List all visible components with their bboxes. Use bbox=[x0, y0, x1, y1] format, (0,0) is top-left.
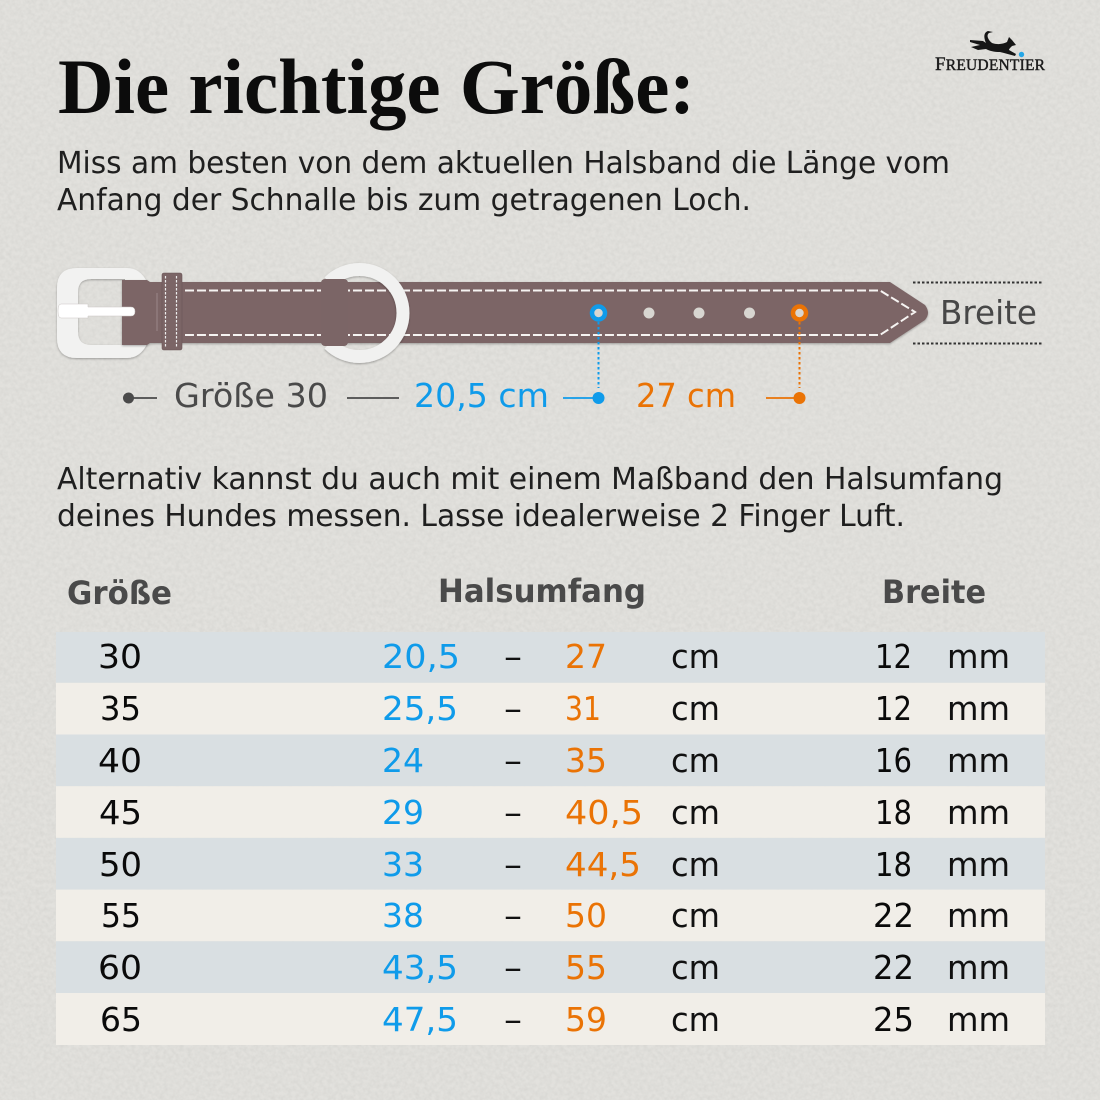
row 30: 30 bbox=[98, 637, 142, 676]
row 50: 50 bbox=[99, 845, 142, 884]
row 65: 59 bbox=[565, 1000, 607, 1039]
belt diagram bbox=[57, 268, 928, 388]
row 55: – bbox=[504, 896, 522, 935]
table header: Größe bbox=[67, 574, 172, 612]
row 35 bbox=[56, 683, 1045, 734]
row 65 bbox=[56, 993, 1045, 1045]
row 40: 16 bbox=[875, 741, 912, 780]
size example legend: 27 cm bbox=[636, 376, 736, 415]
row 45: 45 bbox=[99, 793, 142, 832]
row 60: mm bbox=[947, 948, 1010, 987]
row 50: cm bbox=[671, 845, 720, 884]
row 65: 47,5 bbox=[382, 1000, 458, 1039]
row 60: 43,5 bbox=[382, 948, 458, 987]
stitching bbox=[185, 290, 915, 335]
row 35: mm bbox=[947, 689, 1010, 728]
size example legend bbox=[123, 376, 806, 415]
intro text: Anfang der Schnalle bis zum getragenen Loch. bbox=[57, 183, 751, 218]
size example legend: 20,5 cm bbox=[414, 376, 549, 415]
row 60: 22 bbox=[873, 948, 914, 987]
row 50 bbox=[56, 838, 1045, 890]
row 45: cm bbox=[671, 793, 720, 832]
row 50: 44,5 bbox=[565, 845, 641, 884]
row 65: 25 bbox=[873, 1000, 914, 1039]
row 35: cm bbox=[671, 689, 720, 728]
row 30: 20,5 bbox=[382, 637, 460, 676]
logo: Freudentier bbox=[935, 31, 1046, 75]
row 40: mm bbox=[947, 741, 1010, 780]
row 60: – bbox=[504, 948, 522, 987]
intro text bbox=[57, 146, 950, 218]
row 60 bbox=[56, 941, 1045, 993]
belt strap bbox=[122, 280, 928, 345]
row 65: mm bbox=[947, 1000, 1010, 1039]
row 50: – bbox=[504, 845, 522, 884]
row 45: – bbox=[504, 793, 522, 832]
alternative text: deines Hundes messen. Lasse idealerweise 2 Finger Luft. bbox=[57, 499, 905, 534]
size table bbox=[56, 632, 1045, 1045]
row 50: mm bbox=[947, 845, 1010, 884]
row 55: cm bbox=[671, 896, 720, 935]
row 55: mm bbox=[947, 896, 1010, 935]
row 55: 22 bbox=[873, 896, 914, 935]
size example legend: Größe 30 bbox=[174, 376, 328, 415]
alternative text: Alternativ kannst du auch mit einem Maßband den Halsumfang bbox=[57, 462, 1003, 497]
row 35: 35 bbox=[100, 689, 141, 728]
row 60: cm bbox=[671, 948, 720, 987]
row 35: 31 bbox=[565, 689, 601, 728]
ring loop bbox=[321, 279, 348, 346]
buckle prong bbox=[58, 304, 135, 318]
row 55: 38 bbox=[382, 896, 424, 935]
row 45: 18 bbox=[875, 793, 912, 832]
row 40: cm bbox=[671, 741, 720, 780]
row 65: cm bbox=[671, 1000, 720, 1039]
table header: Halsumfang bbox=[438, 572, 646, 610]
row 65: 65 bbox=[100, 1000, 142, 1039]
row 45: 40,5 bbox=[565, 793, 643, 832]
row 35: – bbox=[504, 689, 522, 728]
row 60: 60 bbox=[98, 948, 142, 987]
logo: Freudentier: FREUDENTIER bbox=[935, 54, 1046, 75]
row 30: 12 bbox=[875, 637, 912, 676]
row 45: 29 bbox=[382, 793, 424, 832]
row 65: – bbox=[504, 1000, 522, 1039]
table header: Breite bbox=[882, 573, 986, 611]
ring bbox=[329, 270, 403, 356]
row 30: 27 bbox=[565, 637, 607, 676]
row 40: 24 bbox=[382, 741, 424, 780]
table header bbox=[67, 572, 986, 612]
intro text: Miss am besten von dem aktuellen Halsband die Länge vom bbox=[57, 146, 950, 181]
row 30: – bbox=[504, 637, 522, 676]
row 30: cm bbox=[671, 637, 720, 676]
holes bbox=[592, 306, 806, 320]
buckle bbox=[57, 268, 147, 358]
width label: Breite bbox=[940, 293, 1037, 332]
row 45: mm bbox=[947, 793, 1010, 832]
row 40: – bbox=[504, 741, 522, 780]
belt keeper bbox=[162, 273, 182, 350]
tick lines bbox=[598, 322, 600, 388]
row 55: 55 bbox=[101, 896, 141, 935]
row 30: mm bbox=[947, 637, 1010, 676]
row 40: 35 bbox=[565, 741, 607, 780]
row 50: 18 bbox=[875, 845, 912, 884]
row 35: 25,5 bbox=[382, 689, 458, 728]
row 40 bbox=[56, 734, 1045, 786]
row 55: 50 bbox=[565, 896, 607, 935]
row 45 bbox=[56, 786, 1045, 838]
row 35: 12 bbox=[875, 689, 912, 728]
row 30 bbox=[56, 632, 1045, 683]
alternative text bbox=[57, 462, 1003, 534]
row 60: 55 bbox=[565, 948, 607, 987]
width label bbox=[913, 282, 1043, 344]
row 50: 33 bbox=[382, 845, 424, 884]
title: Die richtige Größe: bbox=[58, 43, 695, 130]
row 40: 40 bbox=[98, 741, 142, 780]
row 55 bbox=[56, 890, 1045, 941]
